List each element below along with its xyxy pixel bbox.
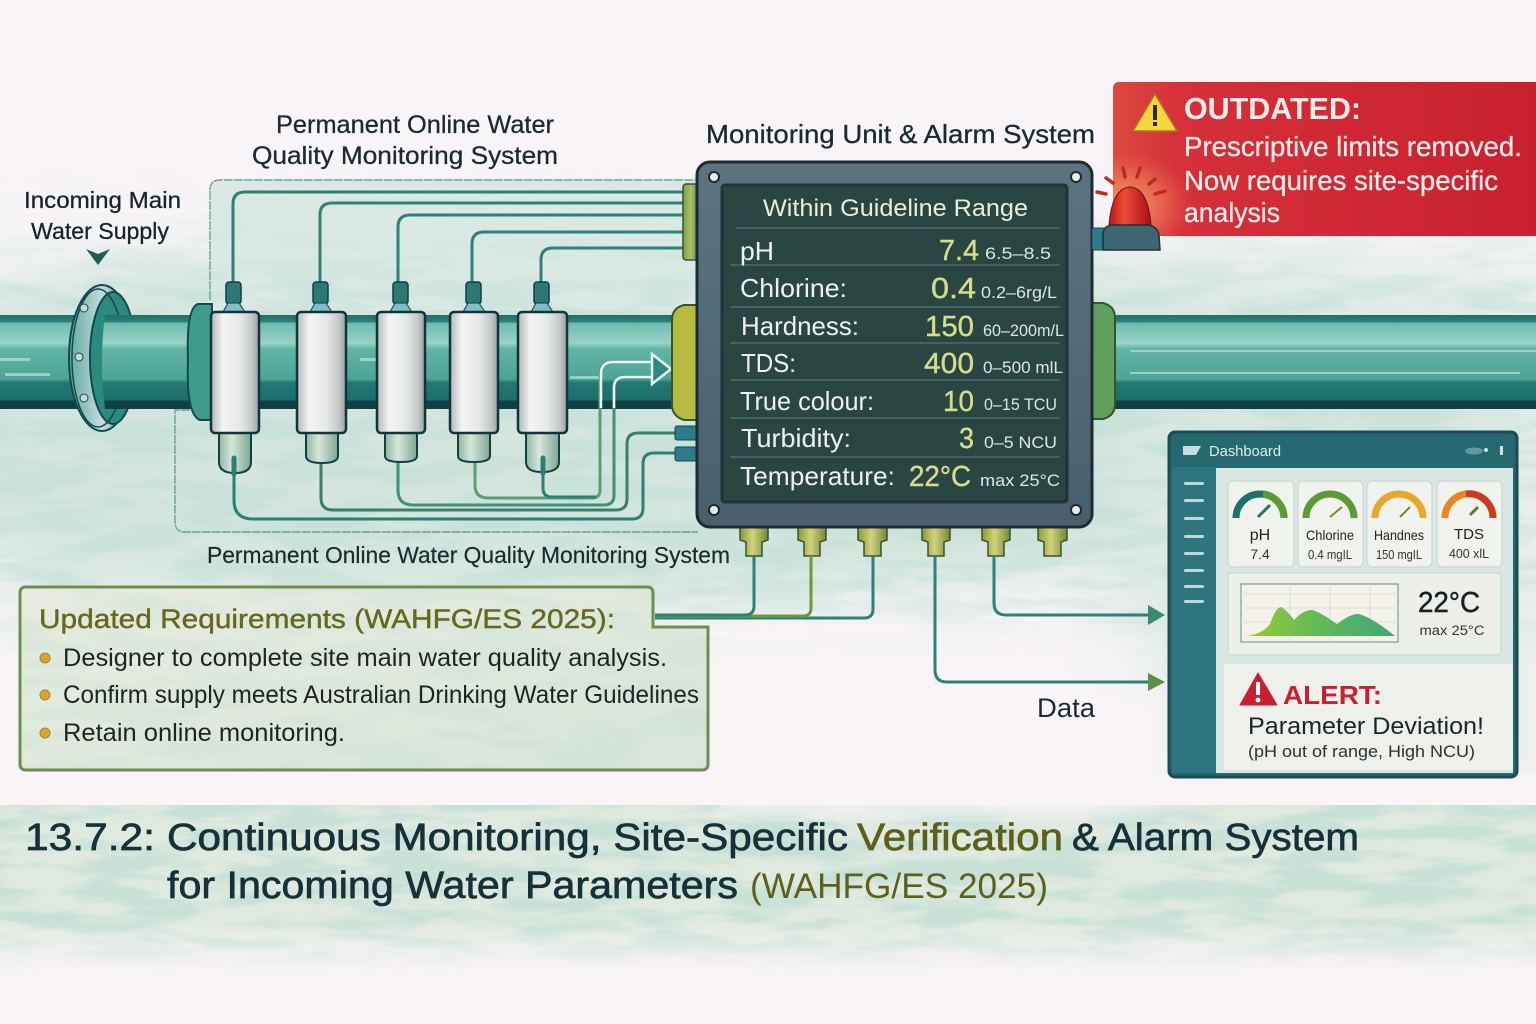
panel: trend chart: max 25°C — [1420, 623, 1485, 638]
panel: monitoring unit — [697, 162, 1092, 527]
parameter labels: Chlorine: — [740, 273, 847, 303]
heading: monitoring unit: Monitoring Unit & Alarm System — [706, 119, 1095, 149]
parameter values — [909, 235, 979, 493]
parameter values: 7.4 — [939, 235, 979, 267]
title: (WAHFG/ES 2025) — [750, 867, 1048, 906]
parameter values: 400 — [924, 348, 974, 380]
screen heading: Within Guideline Range — [763, 195, 1028, 222]
title: Continuous Monitoring, Site-Specific — [167, 817, 848, 859]
requirements heading: Updated Requirements (WAHFG/ES 2025): — [39, 604, 615, 634]
parameter values: 10 — [943, 386, 974, 418]
panel: trend chart: 22°C — [1418, 587, 1480, 619]
incoming supply label: Incoming Main — [24, 187, 181, 213]
parameter labels: Temperature: — [740, 461, 895, 491]
gauge card: pH: 7.4 — [1250, 546, 1270, 562]
parameter labels: True colour: — [740, 386, 874, 416]
parameter labels — [740, 236, 895, 491]
sensor 5 — [518, 282, 567, 473]
heading: monitoring system — [252, 111, 558, 170]
parameter values: 3 — [959, 423, 974, 455]
outdated text: analysis — [1184, 197, 1280, 228]
gauge card: TDS — [1437, 481, 1502, 567]
icon: warning triangle — [1133, 94, 1177, 131]
panel: alert — [1224, 664, 1513, 770]
panel: dashboard — [1169, 432, 1517, 777]
sensor wires bottom — [234, 362, 680, 519]
heading: monitoring system: Quality Monitoring System — [252, 142, 558, 170]
panel: trend chart — [1228, 573, 1501, 655]
dashed sensor enclosure — [175, 180, 698, 532]
right pipe connector — [1090, 303, 1115, 419]
gauge card: pH — [1228, 481, 1294, 567]
guideline ranges: 6.5–8.5 — [985, 244, 1051, 263]
sensor 1 — [211, 282, 259, 474]
gauge card: TDS: 400 xlL — [1449, 546, 1489, 561]
parameter values: 22°C — [909, 461, 971, 493]
parameter values: 0.4 — [931, 273, 976, 305]
outdated text — [1184, 91, 1522, 228]
parameter labels: Turbidity: — [741, 423, 851, 453]
sensor 4 — [450, 282, 498, 462]
dashboard header: Dashboard — [1209, 444, 1281, 460]
panel: outdated warning — [1113, 82, 1536, 236]
caption: monitoring system: Permanent Online Water Quality Monitoring System — [207, 542, 730, 568]
icon: down chevron — [86, 249, 110, 265]
parameter labels: TDS: — [741, 348, 796, 378]
bottom cable glands — [740, 525, 1067, 556]
gauge card: hardness: Handnes — [1374, 527, 1424, 543]
guideline ranges: 0–5 NCU — [984, 433, 1057, 452]
title — [25, 817, 1359, 907]
sidebar menu — [1184, 482, 1204, 603]
connector lines to requirements — [655, 556, 873, 618]
alert arrow to dashboard — [994, 556, 1165, 625]
panel: alert: ALERT: — [1283, 680, 1382, 710]
gauge card: chlorine: Chlorine — [1306, 527, 1354, 543]
requirement items: Designer to complete site main water quality analysis. — [63, 644, 667, 672]
data label: Data — [1037, 693, 1096, 723]
sensor 2 — [297, 282, 346, 463]
bullets — [40, 653, 50, 738]
guideline ranges: 60–200m/L — [983, 321, 1064, 340]
pipe: incoming water main — [0, 315, 1536, 409]
panel: updated requirements — [20, 587, 708, 770]
title: Verification — [857, 817, 1063, 859]
requirement items: Confirm supply meets Australian Drinking Water Guidelines — [63, 681, 699, 709]
gauge card: hardness: 150 mgIL — [1376, 548, 1422, 562]
title: 13.7.2: — [25, 817, 155, 859]
outdated text: Now requires site-specific — [1184, 165, 1498, 196]
pipe collar — [188, 304, 212, 420]
flow arrow — [601, 354, 671, 408]
heading: monitoring system: Permanent Online Water — [276, 111, 554, 139]
incoming supply label: Water Supply — [31, 218, 169, 244]
parameter values: 150 — [925, 311, 974, 343]
outdated text: OUTDATED: — [1184, 91, 1361, 126]
title: for Incoming Water Parameters — [167, 865, 738, 907]
background wash — [0, 181, 1536, 964]
icon: alert triangle — [1240, 673, 1277, 705]
guideline ranges: max 25°C — [980, 471, 1060, 490]
data arrow to dashboard — [935, 556, 1165, 691]
gauge card: pH: pH — [1250, 527, 1270, 544]
gauge card: TDS: TDS — [1454, 526, 1484, 543]
left connectors — [672, 184, 699, 461]
gauge card: hardness — [1367, 481, 1432, 567]
gauge card: chlorine — [1298, 481, 1363, 567]
guideline ranges — [980, 244, 1064, 490]
gauge card: chlorine: 0.4 mgIL — [1308, 548, 1352, 562]
outdated text: Prescriptive limits removed. — [1184, 131, 1522, 162]
parameter labels: pH — [740, 236, 774, 266]
guideline ranges: 0–500 mlL — [983, 358, 1063, 377]
panel: alert: Parameter Deviation! — [1248, 713, 1484, 740]
incoming supply label — [24, 187, 181, 244]
panel: alert: (pH out of range, High NCU) — [1248, 742, 1475, 761]
requirement items — [63, 644, 699, 747]
guideline ranges: 0–15 TCU — [984, 395, 1057, 414]
requirement items: Retain online monitoring. — [63, 719, 345, 747]
icon: alarm beacon — [1092, 168, 1165, 250]
sensor signal wires top — [233, 192, 688, 284]
title: & Alarm System — [1072, 817, 1359, 859]
parameter labels: Hardness: — [741, 311, 859, 341]
sensor 3 — [377, 282, 425, 462]
guideline ranges: 0.2–6rg/L — [981, 283, 1057, 302]
dashboard header — [1183, 444, 1503, 460]
pipe flange left — [69, 285, 190, 431]
